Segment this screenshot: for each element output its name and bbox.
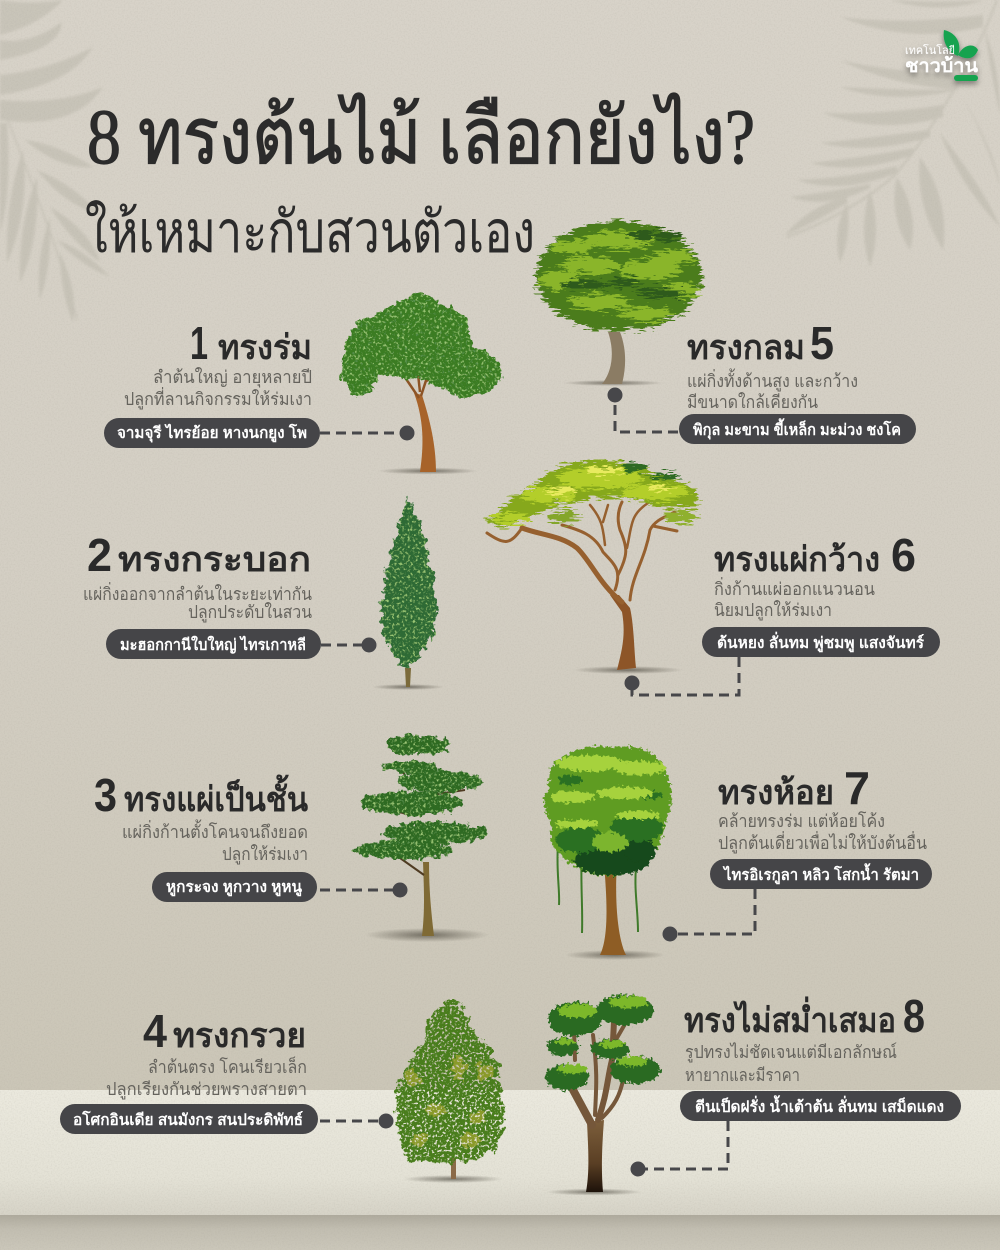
tree 5: round [536,221,702,386]
subtitle: ให้เหมาะกับสวนตัวเอง [85,199,535,265]
panel 6: กิ่งก้านแผ่ออกแนวนอน [714,577,875,599]
panel 4: 4 [143,1005,167,1057]
panel 8 [630,990,961,1176]
panel 7: ไทรอิเรกูลา หลิว โสกน้ำ รัตมา [722,863,919,886]
panel 1 [104,317,414,448]
panel 5: 5 [810,317,834,369]
panel 7: ทรงห้อย [718,774,834,812]
panel 5: แผ่กิ่งทั้งด้านสูง และกว้าง [687,368,858,392]
panel 4: ทรงกรวย [173,1017,306,1055]
tree 4: conical [395,997,505,1183]
panel 2: ปลูกประดับในสวน [188,602,312,623]
tree 7: weeping [544,747,671,960]
panel 6: ทรงแผ่กว้าง [714,541,880,579]
panel 1: 1 [190,317,208,369]
panel 3: หูกระจง หูกวาง หูหนู [166,879,302,898]
panel 6: ต้นหยง ลั่นทม พู่ชมพู แสงจันทร์ [717,631,925,654]
panel 6: 6 [891,529,916,581]
tree 3: layered [353,735,489,942]
panel 4: ลำต้นตรง โคนเรียวเล็ก [148,1056,307,1077]
logo: ชาวบ้าน [905,55,978,77]
icon: logo leaves [944,30,978,58]
tree 8: irregular [545,995,660,1196]
panel 5: พิกุล มะขาม ขี้เหล็ก มะม่วง ชงโค [693,418,901,440]
tree 2: columnar [372,497,444,690]
panel 7: 7 [844,762,870,814]
panel 8: ตีนเป็ดฝรั่ง น้ำเต้าต้น ลั่นทม เสม็ดแดง [695,1095,944,1116]
logo: เทคโนโลยี [905,43,955,57]
panel 3: 3 [94,769,117,821]
palm leaf shadow top left [0,0,110,323]
panel 1: ลำต้นใหญ่ อายุหลายปี [153,367,312,388]
panel 1: จามจุรี ไทรย้อย หางนกยูง โพ [117,423,307,444]
panel 5: ทรงกลม [687,329,805,367]
panel 4: อโศกอินเดีย สนมังกร สนประดิพัทธ์ [73,1110,303,1129]
panel 1: ปลูกที่ลานกิจกรรมให้ร่มเงา [124,387,312,410]
panel 3 [94,769,408,902]
panel 2: มะฮอกกานีใบใหญ่ ไทรเกาหลี [120,635,306,654]
panel 3: ทรงแผ่เป็นชั้น [124,774,308,819]
tree 6: spreading [484,460,699,674]
panel 2 [83,529,376,659]
panel 2: แผ่กิ่งออกจากลำต้นในระยะเท่ากัน [83,582,312,604]
panel 5: มีขนาดใกล้เคียงกัน [687,392,818,412]
panel 7 [662,762,932,942]
palm leaf shadow top right [785,0,1000,267]
panel 7: ปลูกต้นเดี่ยวเพื่อไม่ให้บังต้นอื่น [718,831,927,854]
panel 4: ปลูกเรียงกันช่วยพรางสายตา [106,1079,307,1100]
panel 8: 8 [903,990,925,1042]
panel 3: ปลูกให้ร่มเงา [222,844,308,865]
panel 6: นิยมปลูกให้ร่มเงา [714,600,832,621]
title: 8 ทรงต้นไม้ เลือกยังไง? [87,92,755,180]
panel 4 [60,1005,394,1134]
panel 8: รูปทรงไม่ชัดเจนแต่มีเอกลักษณ์ [685,1042,897,1063]
panel 1: ทรงร่ม [218,329,312,367]
panel 8: หายากและมีราคา [685,1065,800,1085]
tree 1: umbrella [342,291,502,474]
logo [905,30,978,81]
panel 2: 2 [87,529,112,581]
panel 6 [624,529,940,695]
panel 7: คล้ายทรงร่ม แต่ห้อยโค้ง [718,811,885,831]
panel 2: ทรงกระบอก [118,541,311,579]
panel 3: แผ่กิ่งก้านตั้งโคนจนถึงยอด [122,819,308,842]
panel 5 [608,317,916,444]
panel 8: ทรงไม่สม่ำเสมอ [684,996,896,1040]
